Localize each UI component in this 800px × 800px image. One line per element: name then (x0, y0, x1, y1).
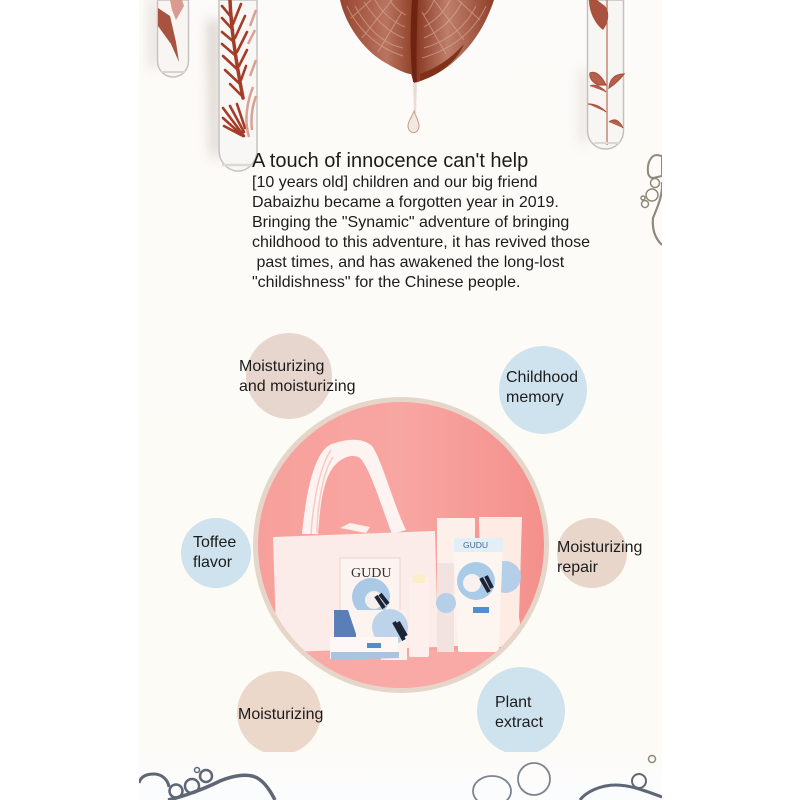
feature circle: Childhood memory: memory (506, 389, 564, 406)
gift box (273, 531, 438, 652)
feature circle: Toffee flavor: Toffee (193, 534, 236, 551)
feature circle: Childhood memory (499, 346, 587, 434)
feature circle: Plant extract: Plant (495, 694, 532, 711)
feature circle: Toffee flavor (181, 518, 251, 588)
body text: past times, and has awakened the long-lost (252, 254, 565, 271)
feature circle: Moisturizing: Moisturizing (238, 706, 323, 723)
drip (413, 83, 417, 113)
lip balm (409, 647, 429, 657)
bubbles: bottom centre (473, 763, 550, 800)
body text: [10 years old] children and our big friend (252, 174, 538, 191)
body text (252, 174, 590, 291)
cream tubes (437, 518, 475, 646)
feature circle: Moisturizing repair: Moisturizing (557, 539, 642, 556)
body text: "childishness" for the Chinese people. (252, 274, 520, 291)
feature circle: Toffee flavor: flavor (193, 554, 233, 571)
product photo circle: GUDU (463, 540, 488, 550)
body text: Dabaizhu became a forgotten year in 2019. (252, 194, 559, 211)
feature circle: Moisturizing repair: repair (557, 559, 599, 576)
small boxes (354, 610, 381, 628)
feature circle: Moisturizing repair (557, 518, 642, 588)
test tube: tall plant (208, 0, 257, 171)
feature circle: Moisturizing and moisturizing: and moisturizing (239, 378, 356, 395)
bag handles (302, 440, 406, 534)
test tube: small left (150, 0, 188, 77)
test tube: right (580, 0, 624, 149)
GUDU logo: GUDU (351, 566, 391, 581)
body text: Bringing the "Synamic" adventure of bringing (252, 214, 569, 231)
bubbles: bottom right (580, 774, 662, 800)
drop (408, 111, 419, 133)
feature circle: Plant extract (477, 667, 565, 755)
bottom band (139, 752, 662, 800)
feature circle: Moisturizing and moisturizing (239, 333, 356, 419)
bubbles: right edge hook (641, 155, 662, 245)
bubbles: bottom left (139, 768, 275, 800)
glass bottle (437, 563, 454, 652)
feature circle: Moisturizing (237, 671, 323, 755)
table surface (306, 650, 496, 688)
feature circle: Childhood memory: Childhood (506, 369, 578, 386)
leaf with drop (340, 0, 494, 133)
page background (139, 0, 662, 800)
body text: childhood to this adventure, it has revived those (252, 234, 590, 251)
feature circle: Moisturizing and moisturizing: Moisturizing (239, 358, 324, 375)
heading: A touch of innocence can't help (252, 150, 528, 172)
product photo circle (250, 397, 550, 700)
feature circle: Plant extract: extract (495, 714, 544, 731)
small bubble (648, 756, 656, 762)
